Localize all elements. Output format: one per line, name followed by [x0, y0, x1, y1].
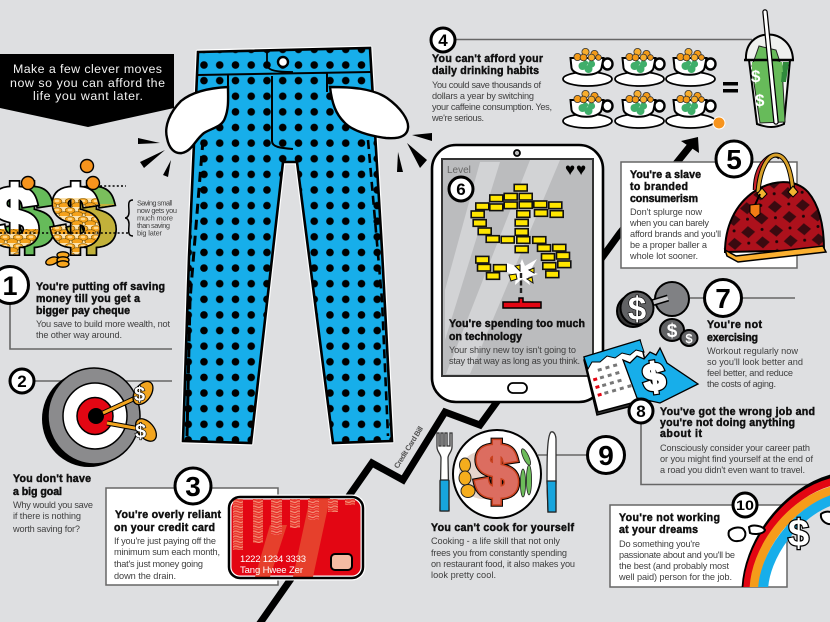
caption: saving small: much more: [137, 214, 173, 222]
hearts: [565, 160, 586, 179]
icon: brace: [125, 200, 133, 236]
text: too much on technology: Your shiny new toy isn't going to: [449, 345, 576, 355]
item 8: wrong job: about it: [660, 428, 702, 440]
item 1: saving: 1: [2, 271, 18, 301]
caption: saving small: Saving small: [137, 198, 172, 208]
panel 5: branded consumerism: be a proper baller a: [630, 240, 708, 250]
illustration: calendar and pay cheque: $: [641, 356, 668, 400]
illustration: calendar and pay cheque: [584, 340, 698, 415]
item 4: drinking habits text: daily drinking habits: [432, 65, 539, 77]
illustration: dollar signs filling with coins: $: [6, 170, 53, 264]
item 7 marker and rule: 7: [715, 283, 731, 314]
panel 5: branded consumerism: You're a slave: [630, 169, 701, 181]
text: can't cook: You can't cook for yourself: [431, 522, 574, 534]
illustration: dartboard: [42, 368, 160, 467]
illustration: dollar signs filling with coins: $: [52, 170, 99, 264]
item 8: wrong job: a road you didn't even want to travel.: [660, 465, 805, 475]
panel 5: branded consumerism: Don't splurge now: [630, 207, 702, 217]
illustration: dollar signs filling with coins: $: [68, 170, 115, 264]
level 6 badge: [449, 177, 473, 201]
item 1: saving: [0, 266, 172, 349]
caption: saving small: now gets you: [137, 206, 177, 215]
level 6 badge: 6: [456, 180, 466, 199]
panel 10: dreams: at your dreams: [619, 524, 698, 536]
illustration: red credit card: Tang Hwee Zer: [240, 565, 303, 576]
item 4: drinking habits text: 4: [438, 31, 448, 50]
panel 5: branded consumerism: when you can barely: [629, 218, 709, 228]
icon: bubble tea cup of money: [744, 12, 794, 127]
panel 3: credit card: 3: [185, 471, 201, 502]
caption: saving small: big later: [137, 228, 163, 238]
item 7 marker and rule: [690, 280, 795, 316]
text: no big goal: Why would you save: [13, 500, 93, 510]
banner: make a few clever moves: [0, 54, 174, 127]
illustration: fork, plate and knife: [437, 430, 588, 518]
icon: dumbbell and coins: $: [628, 290, 646, 327]
item 8: wrong job: 8: [636, 402, 646, 421]
item 4: drinking habits text: [431, 28, 752, 123]
item 8: wrong job: you're not doing anything: [660, 417, 795, 429]
caption: saving small: than saving: [137, 221, 170, 230]
illustration: red credit card: [229, 497, 363, 578]
text: not exercising: exercising: [707, 332, 758, 344]
item 2 marker and rule: [10, 369, 172, 393]
panel 3: credit card: [106, 468, 278, 585]
illustration: fork, plate and knife: $: [476, 430, 517, 513]
illustration: fork, plate and knife: $: [476, 430, 517, 513]
text: too much on technology: [449, 318, 585, 366]
item 4: drinking habits text: You could save thousands of: [432, 80, 541, 90]
panel 5: branded consumerism: 5: [726, 144, 742, 175]
illustration: fork, plate and knife: $: [476, 430, 517, 513]
text: can't cook: Cooking - a life skill that not only: [431, 536, 560, 546]
item 4: drinking habits text: You can't afford your: [432, 53, 543, 65]
text: not exercising: feel better, and reduce: [707, 368, 793, 378]
rising debt arrow line: [258, 137, 699, 622]
illustration: dartboard: $: [134, 384, 145, 406]
item 9 marker: [588, 436, 624, 474]
item 2 marker and rule: 2: [17, 372, 27, 391]
text: no big goal: worth saving for?: [12, 524, 80, 534]
illustration: dollar signs filling with coins: $: [52, 170, 99, 264]
illustration: tablet with game: [432, 145, 603, 402]
icon: equals sign: [723, 82, 738, 92]
item 8: wrong job: or you might find yourself at the end of: [660, 454, 813, 464]
icon: right motion lines: [397, 133, 432, 172]
illustration: dollar signs filling with coins: $: [68, 170, 115, 264]
panel 10: dreams: passionate about and you'll be: [619, 550, 735, 560]
panel 5: branded consumerism: afford brands and you'll: [630, 229, 721, 239]
text: no big goal: You don't have: [13, 473, 91, 485]
icon: dumbbell and coins: $: [667, 321, 678, 342]
panel 5: branded consumerism: [621, 141, 797, 268]
clouds: [729, 527, 745, 541]
panel 3: credit card: that's just money going: [114, 559, 203, 569]
text: not exercising: the costs of aging.: [707, 379, 776, 389]
icon: six coffee cups of coins: [563, 48, 725, 129]
item 1: saving: You're putting off saving: [36, 281, 165, 293]
illustration: tablet with game: Level: [447, 165, 471, 176]
right pocket: [330, 87, 408, 138]
icon: dumbbell and coins: $: [685, 331, 693, 346]
bricks: [471, 184, 571, 279]
item 4: drinking habits text: your caffeine consumption. Yes,: [432, 102, 552, 112]
panel 3: credit card: minimum sum each month,: [114, 547, 220, 557]
text: no big goal: [12, 473, 93, 534]
panel 10: dreams: Do something you're: [619, 539, 700, 549]
panel 3: credit card: down the drain.: [114, 571, 176, 581]
panel 10: dreams: You're not working: [619, 512, 720, 524]
panel 10: dreams: the best (and probably most: [619, 561, 729, 571]
text: not exercising: so you'll look better and: [707, 357, 803, 367]
illustration: dollar signs filling with coins: $: [6, 170, 53, 264]
panel 10: dreams: well paid) person for the job.: [618, 572, 732, 582]
screen: [442, 159, 593, 376]
item 8: wrong job: You've got the wrong job and: [660, 406, 815, 418]
item 1: saving: money till you get a: [36, 293, 140, 305]
text: no big goal: if there is nothing: [13, 511, 81, 521]
banner: make a few clever moves: Make a few clever moves: [13, 62, 162, 76]
red paddle: [503, 298, 541, 308]
illustration: rainbow: $: [788, 513, 809, 555]
illustration: dollar signs filling with coins: $: [68, 170, 115, 264]
text: not exercising: [707, 319, 803, 389]
illustration: rainbow: [729, 478, 830, 592]
panel 10: dreams: [610, 505, 787, 587]
text: too much on technology: You're spending too much: [449, 318, 585, 330]
text: too much on technology: on technology: [449, 331, 522, 343]
item 4: drinking habits text: dollars a year by switching: [432, 91, 534, 101]
hearts: ♥: [576, 160, 586, 179]
text: not exercising: Workout regularly now: [707, 346, 798, 356]
item 4: drinking habits text: we're serious.: [431, 113, 484, 123]
panel 3: credit card: You're overly reliant: [115, 509, 221, 521]
illustration: calendar and pay cheque: $: [641, 356, 668, 400]
text: can't cook: [431, 522, 575, 580]
illustration: dollar signs filling with coins: [0, 160, 128, 267]
caption: saving small: [137, 198, 177, 238]
hearts: ♥: [565, 160, 575, 179]
item 8: wrong job: Consciously consider your career path: [660, 443, 810, 453]
item 1: saving: bigger pay cheque: [36, 305, 130, 317]
text: can't cook: frees you from constantly spending: [431, 548, 567, 558]
icon: dumbbell and coins: [617, 282, 698, 346]
banner: make a few clever moves: now so you can afford the: [10, 76, 165, 90]
knife: [538, 432, 588, 512]
item 10 marker: 10: [736, 497, 754, 513]
banner: make a few clever moves: life you want later.: [33, 89, 143, 103]
text: no big goal: a big goal: [13, 486, 62, 498]
icon: bubble tea cup of money: $: [751, 67, 761, 86]
item 8: wrong job: [629, 399, 815, 484]
panel 5: branded consumerism: to branded: [630, 181, 688, 193]
illustration: designer handbag: [725, 155, 826, 262]
text: can't cook: look pretty cool.: [431, 570, 496, 580]
illustration: red credit card: 1222 1234 3333: [240, 554, 306, 565]
illustration: dartboard: $: [135, 421, 146, 443]
illustration: dollar signs filling with coins: $: [52, 170, 99, 264]
brick explosion: [507, 259, 538, 295]
left pocket: [166, 87, 228, 153]
panel 5: branded consumerism: consumerism: [630, 193, 698, 205]
panel 5: branded consumerism: whole lot sooner.: [629, 251, 698, 261]
item 1: saving: the other way around.: [36, 330, 122, 340]
panel 3: credit card: If you're just paying off the: [114, 536, 216, 546]
text: not exercising: You're not: [707, 319, 762, 331]
item 1: saving: You save to build more wealth, not: [36, 319, 170, 329]
item 10 marker: [733, 493, 757, 517]
label: credit card bill: Credit Card Bill: [392, 425, 425, 470]
illustration: empty pocket jeans: [166, 48, 408, 443]
item 9 marker: 9: [598, 440, 614, 471]
plate: [453, 430, 541, 518]
icon: left motion lines: [138, 138, 171, 177]
fork: [437, 433, 452, 511]
text: can't cook: on restaurant food, it also makes you: [431, 559, 575, 569]
text: too much on technology: stay that way as long as you think.: [449, 356, 580, 366]
icon: bubble tea cup of money: $: [755, 91, 765, 110]
panel 3: credit card: on your credit card: [114, 522, 215, 534]
